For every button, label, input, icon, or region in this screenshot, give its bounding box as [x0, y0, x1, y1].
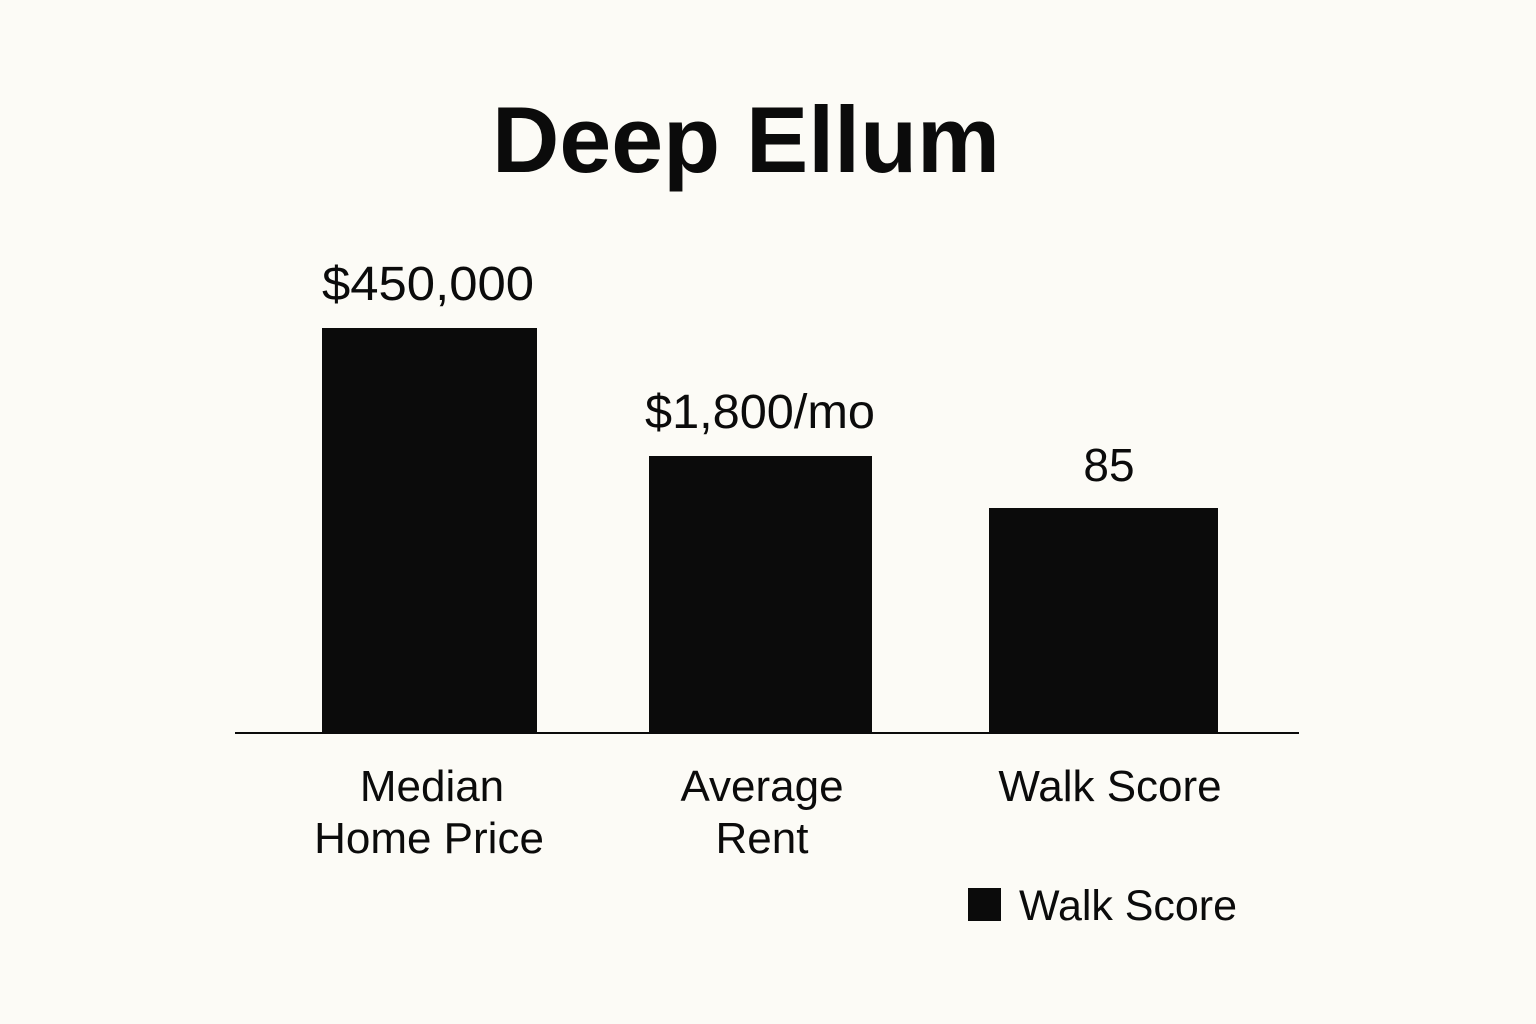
bar chart: [235, 258, 1299, 863]
axis line: [235, 732, 1299, 734]
value label: 85: 85: [1083, 439, 1135, 491]
category label: average rent: Average: [680, 762, 844, 811]
bar: walk score: [989, 508, 1218, 733]
category label: average rent: Rent: [716, 814, 808, 863]
title: Deep Ellum: [492, 87, 1000, 192]
bar: median home price: [322, 328, 537, 733]
category label: median home price: Home Price: [314, 814, 544, 863]
category label: median home price: Median: [360, 762, 504, 811]
legend: Walk Score: [1019, 882, 1237, 930]
bar: average rent: [649, 456, 872, 733]
value label: $450,000: $450,000: [322, 258, 534, 311]
category label: walk score: Walk Score: [998, 762, 1222, 811]
value label: $1,800/mo: $1,800/mo: [645, 386, 875, 439]
